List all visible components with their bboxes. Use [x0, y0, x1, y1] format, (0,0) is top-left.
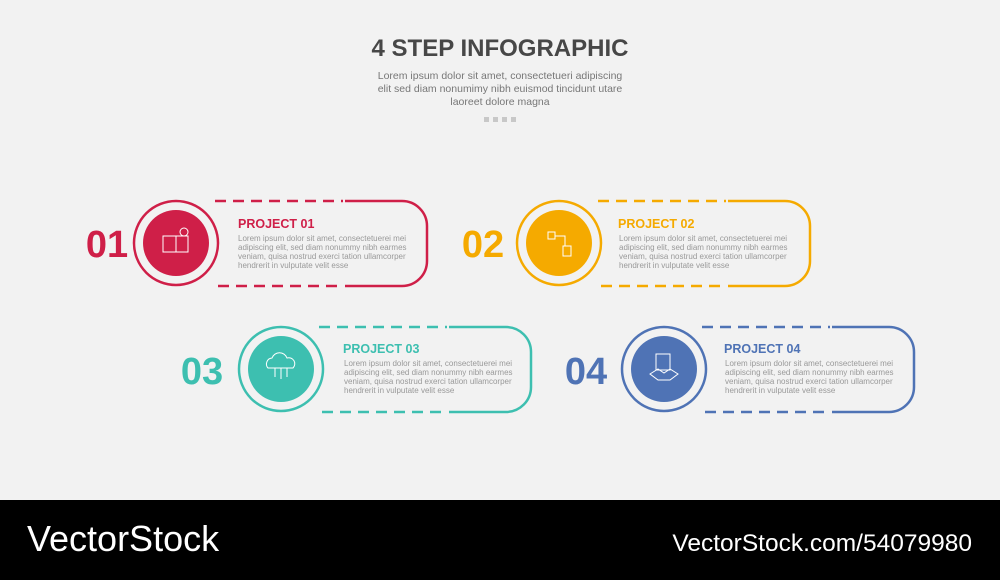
step 02: hendrerit in vulputate velit esse — [619, 261, 730, 270]
title: 4 STEP INFOGRAPHIC — [372, 35, 628, 62]
step 04: 04 — [565, 351, 607, 393]
footer band — [0, 500, 1000, 580]
footer band: VectorStock — [27, 518, 220, 559]
dots — [484, 117, 516, 122]
step 04: Lorem ipsum dolor sit amet, consectetuerei mei — [725, 359, 893, 368]
step 03: veniam, quisa nostrud exerci tation ullamcorper — [344, 377, 512, 386]
step 03: Lorem ipsum dolor sit amet, consectetuerei mei — [344, 359, 512, 368]
step 02 — [462, 201, 810, 286]
subtitle — [378, 70, 622, 108]
step 04: adipiscing elit, sed diam nonummy nibh earmes — [725, 368, 894, 377]
footer band: VectorStock.com/54079980 — [672, 530, 972, 557]
step 02: Lorem ipsum dolor sit amet, consectetuerei mei — [619, 234, 787, 243]
step 02: adipiscing elit, sed diam nonummy nibh earmes — [619, 243, 788, 252]
step 01: Lorem ipsum dolor sit amet, consectetuerei mei — [238, 234, 406, 243]
step 02: PROJECT 02 — [618, 217, 694, 231]
subtitle: laoreet dolore magna — [450, 96, 550, 108]
icon: cloud — [266, 353, 295, 379]
step 04: hendrerit in vulputate velit esse — [725, 386, 836, 395]
step 01: 01 — [86, 224, 128, 266]
step 03 — [181, 327, 531, 412]
step 03: hendrerit in vulputate velit esse — [344, 386, 455, 395]
icon: book — [163, 228, 188, 252]
step 01: hendrerit in vulputate velit esse — [238, 261, 349, 270]
step 04: veniam, quisa nostrud exerci tation ullamcorper — [725, 377, 893, 386]
step 03: adipiscing elit, sed diam nonummy nibh earmes — [344, 368, 513, 377]
step 02: 02 — [462, 224, 504, 266]
step 01: PROJECT 01 — [238, 217, 314, 231]
subtitle: elit sed diam nonumimy nibh euismod tincidunt utare — [378, 83, 622, 95]
icon: flow — [548, 232, 571, 256]
step 01: adipiscing elit, sed diam nonummy nibh earmes — [238, 243, 407, 252]
subtitle: Lorem ipsum dolor sit amet, consectetueri adipiscing — [378, 70, 622, 82]
step 03: 03 — [181, 351, 223, 393]
step 01: veniam, quisa nostrud exerci tation ullamcorper — [238, 252, 406, 261]
step 04 — [565, 327, 914, 412]
icon: handshake — [650, 354, 678, 380]
step 01 — [86, 201, 427, 286]
step 02: veniam, quisa nostrud exerci tation ullamcorper — [619, 252, 787, 261]
step 03: PROJECT 03 — [343, 342, 419, 356]
step 04: PROJECT 04 — [724, 342, 800, 356]
